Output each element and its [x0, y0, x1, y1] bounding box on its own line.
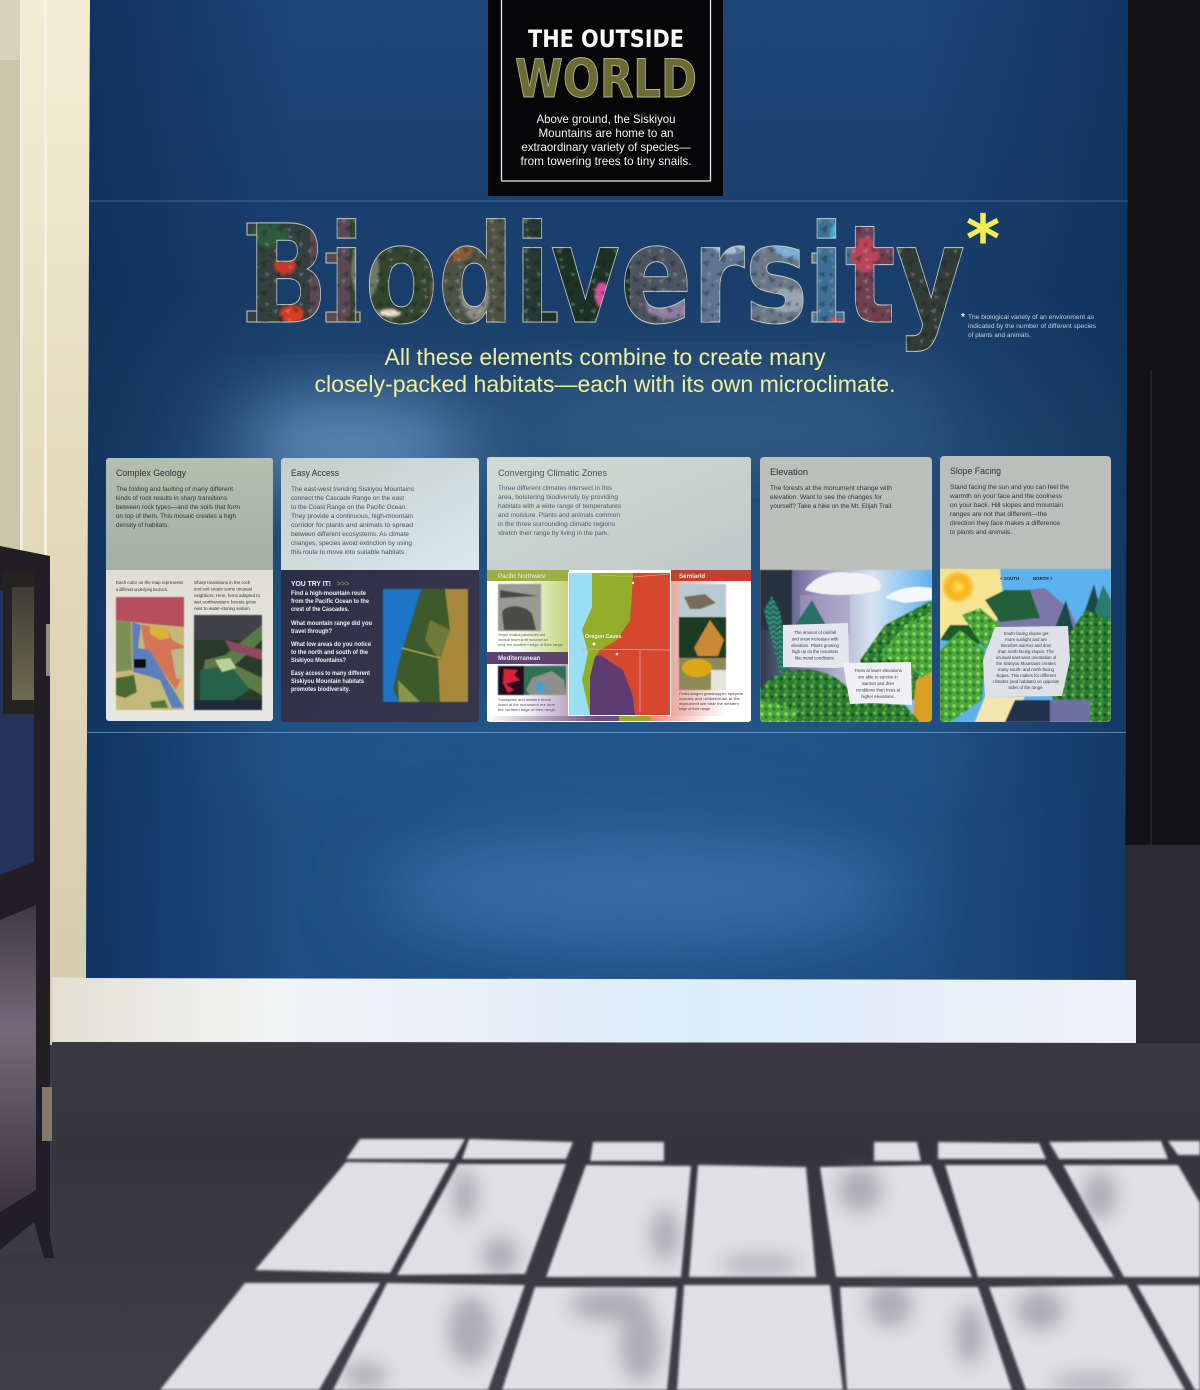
- slope callout: many south- and north-facing: [998, 667, 1055, 672]
- geology captions: Each color on the map represents: [116, 580, 183, 585]
- geology body: kinds of rock results in sharp transitions: [116, 495, 227, 502]
- compass label: NORTH >: [1033, 576, 1053, 581]
- sign body: [520, 112, 692, 168]
- climate body: Three different climates intersect in this: [498, 485, 612, 492]
- geology body: density of habitats.: [116, 522, 169, 529]
- slope body: [949, 484, 1069, 536]
- elevation callouts: like moist conditions.: [795, 656, 835, 660]
- you try it: crest of the Cascades.: [291, 606, 349, 613]
- elevation callouts: elevation. Plants growing: [791, 643, 839, 648]
- geology captions: Sharp transitions in the rock: [194, 580, 251, 585]
- slope callout: therefore warmer and drier: [1001, 643, 1052, 648]
- mediterranean band: [487, 652, 569, 664]
- panel: slope facing: [939, 456, 1111, 722]
- yellow asterisk: *: [966, 201, 1000, 278]
- access body: to the Coast Range on the Pacific Ocean.: [291, 504, 407, 511]
- blue wall: [86, 0, 1128, 980]
- fern photo: [194, 615, 262, 710]
- carpet floor: [0, 1042, 1200, 1390]
- access body: connect the Cascade Range on the east: [291, 495, 404, 502]
- climate body: area, bolstering biodiversity by providing: [498, 494, 618, 501]
- sign body: from towering trees to tiny snails.: [520, 154, 692, 168]
- geology captions: next to water-storing sedum.: [194, 606, 251, 611]
- pacific northwest caption: Oregon ensatina (salamander) and: [498, 633, 545, 637]
- semiarid caption: edge of their range.: [679, 707, 711, 711]
- mottled shadows on floor light: [343, 1168, 1130, 1390]
- salamander photo: [498, 584, 541, 631]
- compass label: < SOUTH: [1000, 576, 1019, 581]
- climate body: [498, 485, 621, 537]
- cabinet: [0, 546, 54, 1258]
- pacific northwest caption: [498, 633, 564, 647]
- elevation callouts: are able to survive in: [858, 674, 898, 680]
- geology heading: Complex Geology: [116, 467, 186, 478]
- geology captions: neighbors. Here, ferns adapted to: [194, 593, 261, 598]
- sign: the outside world: [488, 0, 723, 196]
- elevation body: The forests at the monument change with: [770, 485, 892, 492]
- chevrons: >>>: [337, 581, 349, 588]
- mediterranean photos: [498, 666, 566, 695]
- footnote: [961, 312, 1096, 339]
- geology body: [116, 486, 240, 529]
- semiarid band: [671, 570, 751, 581]
- elevation body: elevation. Want to see the changes for: [770, 494, 883, 501]
- slope callout: sides of the range.: [1008, 685, 1044, 690]
- elevation callouts: [783, 623, 912, 705]
- semiarid caption: coronis and rubberbrush at the: [679, 697, 740, 701]
- you try it: Siskiyou Mountain habitats: [291, 678, 365, 685]
- geology map: [116, 597, 184, 710]
- semiarid caption: [679, 692, 743, 711]
- geology captions: wet northwestern forests grow: [194, 600, 257, 604]
- slope body: ranges are not that different—the: [950, 511, 1047, 518]
- footnote: *: [961, 312, 965, 323]
- subtitle: All these elements combine to create many: [384, 344, 826, 370]
- you try it: Siskiyou Mountains?: [291, 657, 346, 664]
- panel: elevation: [760, 457, 932, 722]
- slope callout: slopes. This makes for different: [996, 673, 1057, 678]
- pacific northwest caption: mountain beaver at the monument are: [498, 638, 548, 642]
- climate body: and moisture. Plants and animals common: [498, 512, 620, 519]
- slope callout: South-facing slopes get: [1004, 631, 1049, 636]
- semiarid caption: Pallid-winged grasshopper, speyeria: [679, 692, 743, 696]
- slope callout: [983, 626, 1070, 697]
- slope body: warmth on your face and the coolness: [949, 493, 1062, 500]
- slope callout: the Siskiyou Mountains creates: [996, 661, 1056, 666]
- geology captions: [116, 580, 261, 611]
- pacific northwest caption: near the southern edge of their range.: [498, 643, 564, 647]
- elevation callouts: conditions than trees at: [856, 688, 901, 692]
- compass label: [1000, 576, 1053, 581]
- access body: between different ecosystems. As climate: [291, 531, 409, 538]
- access body: corridor for plants and animals to spread: [291, 522, 413, 529]
- access body: [291, 486, 414, 556]
- heading texture: Biodiversity: [247, 197, 965, 355]
- pacific northwest band: Pacific Northwest: [498, 573, 546, 580]
- climate body: in the three surrounding climatic regions: [498, 521, 615, 528]
- mediterranean caption: the northern edge of their range.: [498, 708, 556, 712]
- footnote: The biological variety of an environment as: [968, 314, 1094, 321]
- climate map: [568, 572, 671, 716]
- geology captions: a different underlying bedrock.: [116, 587, 168, 592]
- elevation callouts: and snow increases with: [792, 636, 839, 642]
- footnote: of plants and animals.: [968, 332, 1031, 339]
- you try it: YOU TRY IT!: [291, 581, 331, 588]
- geology body: on top of them. This mosaic creates a high: [116, 513, 236, 520]
- slope callout: climates (and habitats) on opposite: [993, 679, 1060, 684]
- elevation callouts: high up on the mountain: [792, 649, 839, 654]
- panel: converging climatic zones: [487, 457, 751, 722]
- you try it: [291, 581, 372, 693]
- slope body: direction they face makes a difference: [950, 520, 1060, 527]
- sign body: extraordinary variety of species—: [522, 140, 690, 154]
- you try it: What mountain range did you: [291, 620, 372, 627]
- access body: changes, species avoid extinction by using: [291, 540, 412, 547]
- climate heading: Converging Climatic Zones: [498, 467, 607, 478]
- slope heading: Slope Facing: [950, 465, 1001, 476]
- elevation callouts: The amount of rainfall: [794, 630, 836, 635]
- geology body: between rock types—and the soils that form: [116, 504, 240, 511]
- semiarid caption: monument are near the western: [679, 702, 739, 706]
- subtitle: closely-packed habitats—each with its own microclimate.: [314, 371, 896, 397]
- mediterranean caption: lizard at the monument are near: [498, 703, 556, 707]
- elevation callouts: warmer and drier: [862, 681, 895, 686]
- geology body: The folding and faulting of many different: [116, 486, 233, 493]
- pacific northwest band: [487, 570, 569, 581]
- sign body: Above ground, the Siskiyou: [536, 112, 676, 126]
- you try it: What low areas do you notice: [291, 641, 372, 648]
- sign body: Mountains are home to an: [538, 126, 674, 140]
- mediterranean band: Mediterranean: [498, 655, 541, 662]
- slope body: Stand facing the sun and you can feel the: [950, 484, 1069, 491]
- you try it: travel through?: [291, 628, 332, 635]
- footnote: indicated by the number of different species: [968, 323, 1096, 330]
- heading: biodiversity: Biodiversity: [247, 197, 965, 355]
- mediterranean caption: [498, 698, 556, 712]
- elevation callouts: Trees at lower elevations: [854, 668, 902, 673]
- slope callout: more sunlight and are: [1005, 637, 1047, 642]
- panel: complex geology: [106, 458, 273, 721]
- semiarid photos: [679, 584, 726, 690]
- sign title: THE OUTSIDE: [528, 25, 684, 53]
- window light on the floor: [160, 1139, 1200, 1390]
- zone backgrounds: [487, 581, 751, 721]
- slope callout: than north-facing slopes. The: [998, 649, 1054, 654]
- you try it: Find a high-mountain route: [291, 590, 367, 597]
- climate body: stretch their range by living in the park.: [498, 530, 609, 537]
- elevation body: yourself? Take a hike on the Mt. Elijah Trail.: [770, 503, 893, 510]
- panel: easy access: [281, 458, 479, 722]
- semiarid band: Semiarid: [679, 573, 705, 580]
- elevation illustration: [760, 570, 932, 722]
- mediterranean caption: Snowplant and western fence: [498, 698, 551, 702]
- subtitle: [314, 344, 896, 397]
- you try it: from the Pacific Ocean to the: [291, 598, 369, 605]
- elevation body: [770, 485, 893, 510]
- access heading: Easy Access: [291, 467, 339, 478]
- you try it: Easy access to many different: [291, 670, 370, 677]
- you try it: to the north and south of the: [291, 649, 368, 656]
- climate body: habitats with a wide range of temperatures: [498, 503, 621, 510]
- elevation heading: Elevation: [770, 466, 808, 477]
- sign world: WORLD: [515, 49, 697, 110]
- access body: this route to move into suitable habitats.: [291, 549, 406, 556]
- access body: They provide a continuous, high-mountain: [291, 513, 413, 520]
- slope body: on your back. Hill slopes and mountain: [950, 502, 1063, 509]
- elevation callouts: higher elevations.: [861, 694, 895, 699]
- map label: Oregon Caves: [585, 634, 622, 640]
- slope illustration: [939, 568, 1111, 722]
- slope body: to plants and animals.: [950, 529, 1012, 536]
- geology captions: and soil create some unusual: [194, 586, 252, 592]
- slope callout: unusual east-west orientation of: [996, 655, 1057, 660]
- you try it: promotes biodiversity.: [291, 686, 350, 693]
- baseboard: [52, 977, 1136, 1043]
- satellite map: [383, 589, 468, 702]
- access body: The east-west trending Siskiyou Mountains: [291, 486, 414, 493]
